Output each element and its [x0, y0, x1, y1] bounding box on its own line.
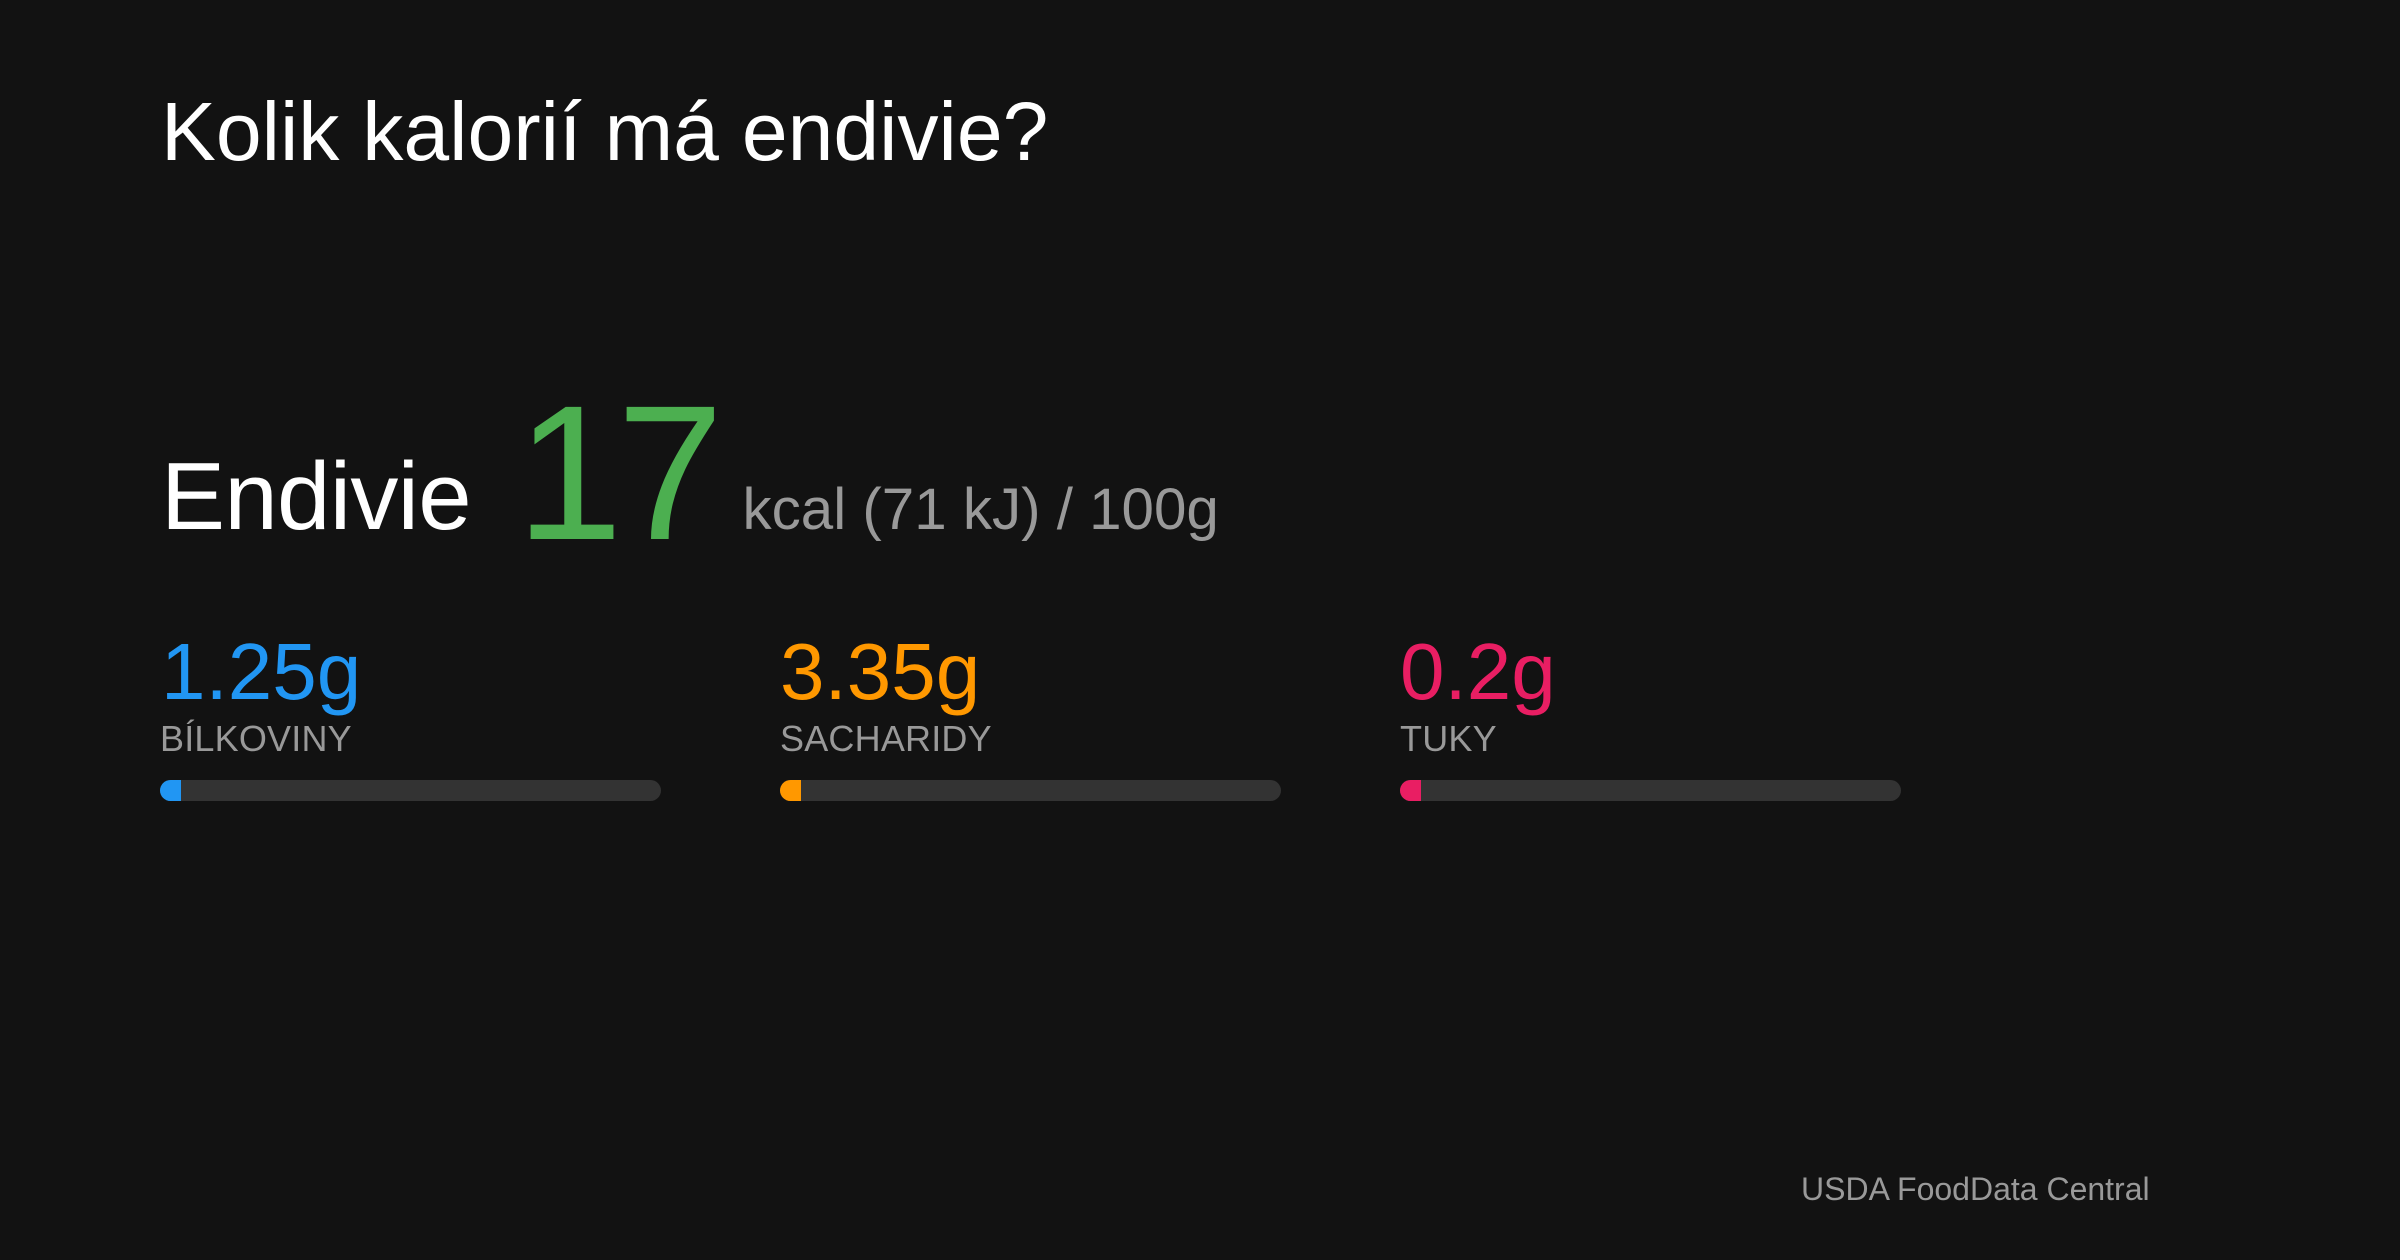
calorie value: 17 — [516, 365, 718, 580]
carbohydrates label: SACHARIDY — [780, 718, 992, 759]
protein value: 1.25g — [161, 627, 361, 716]
fat value: 0.2g — [1400, 627, 1556, 716]
panel: carbohydrates — [780, 627, 1281, 801]
protein label: BÍLKOVINY — [160, 718, 352, 759]
food name: Endivie — [161, 443, 471, 550]
panel: fat — [1400, 627, 1901, 801]
carbohydrates value: 3.35g — [780, 627, 980, 716]
calorie unit: kcal (71 kJ) / 100g — [742, 477, 1219, 542]
fat label: TUKY — [1400, 718, 1497, 759]
carbohydrates bar — [780, 780, 1281, 801]
fat bar — [1400, 780, 1901, 801]
title: Kolik kalorií má endivie? — [161, 86, 1048, 178]
protein bar — [160, 780, 661, 801]
source: USDA FoodData Central — [1801, 1171, 2150, 1207]
panel: protein — [160, 627, 661, 801]
